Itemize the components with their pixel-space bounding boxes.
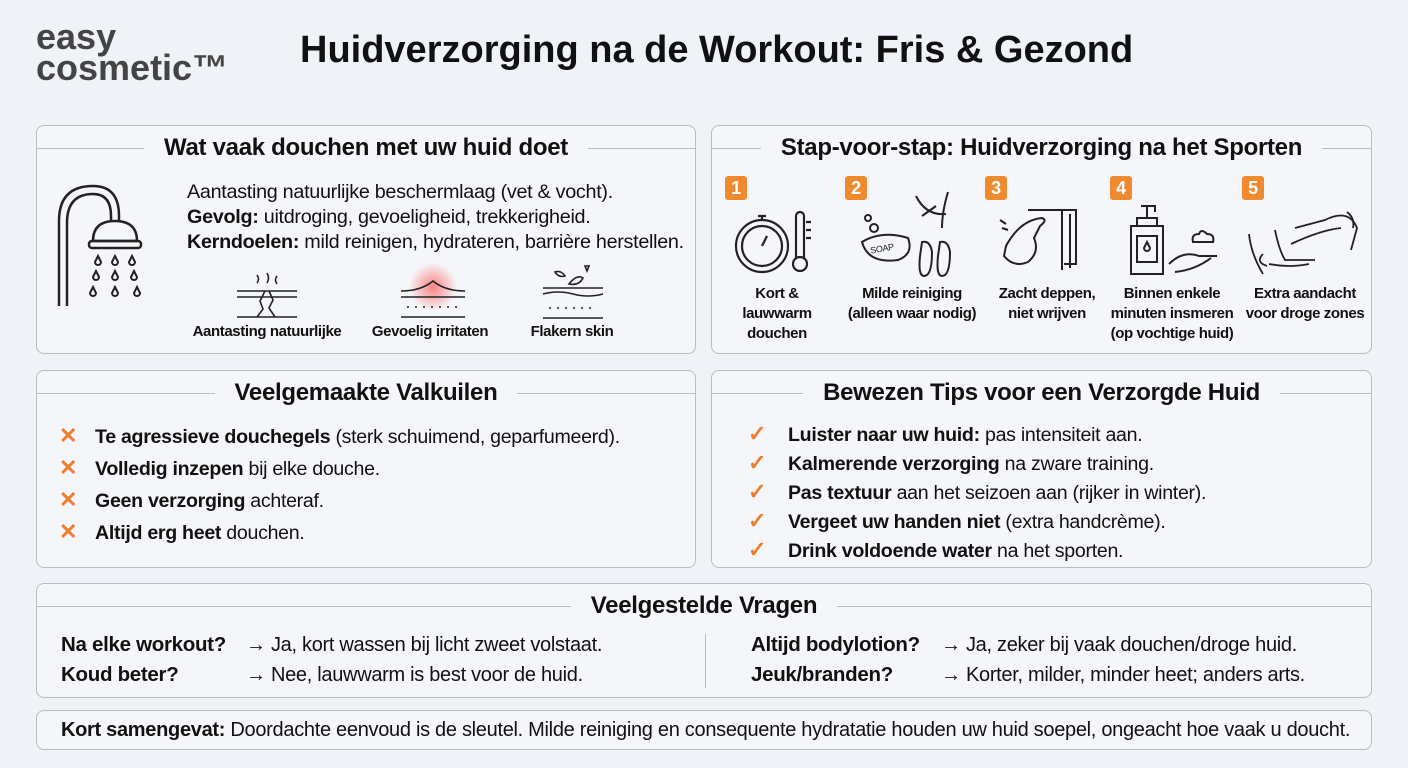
text block: Aantasting natuurlijke beschermlaag (vet & vocht). bbox=[187, 181, 613, 203]
list: Altijd erg heet douchen. bbox=[95, 522, 305, 544]
text block: Gevolg: uitdroging, gevoeligheid, trekkerigheid. bbox=[187, 206, 590, 228]
list: ✕ bbox=[59, 423, 77, 448]
heading: Stap-voor-stap: Huidverzorging na het Sporten bbox=[781, 134, 1302, 161]
list: Pas textuur aan het seizoen aan (rijker in winter). bbox=[788, 482, 1206, 504]
icon: flaky skin bbox=[542, 265, 604, 319]
step 1: 1 bbox=[731, 178, 741, 198]
list: ✕ bbox=[59, 519, 77, 544]
step 2: (alleen waar nodig) bbox=[848, 305, 976, 322]
list: ✓ bbox=[748, 450, 766, 475]
list: ✓ bbox=[748, 537, 766, 562]
step 1: Kort & bbox=[755, 285, 799, 302]
step 4: minuten insmeren bbox=[1111, 305, 1233, 322]
logo: cosmetic™ bbox=[36, 47, 228, 88]
panel: wat vaak douchen: Flakern skin bbox=[531, 323, 613, 340]
icon: cracked skin bbox=[237, 272, 297, 318]
summary: Kort samengevat: Doordachte eenvoud is de sleutel. Milde reiniging en consequente hydratatie houden uw huid soepel, ongeacht hoe vaak u doucht. bbox=[61, 719, 1350, 741]
faq right: Jeuk/branden? bbox=[751, 663, 893, 686]
panel: tips bbox=[711, 370, 1372, 568]
step 4: Binnen enkele bbox=[1124, 285, 1220, 302]
faq left bbox=[61, 633, 602, 686]
list: Kalmerende verzorging na zware training. bbox=[788, 453, 1154, 475]
text block: Kerndoelen: mild reinigen, hydrateren, barrière herstellen. bbox=[187, 231, 684, 253]
step 3: Zacht deppen, bbox=[999, 285, 1095, 302]
step 1: lauwwarm bbox=[742, 305, 812, 322]
step 2 bbox=[845, 176, 976, 322]
faq right: → Korter, milder, minder heet; anders arts. bbox=[941, 664, 1305, 686]
panel: valkuilen bbox=[36, 370, 696, 568]
step 3 bbox=[985, 176, 1095, 322]
panel: FAQ bbox=[36, 583, 1372, 698]
text block bbox=[187, 181, 684, 253]
title: Huidverzorging na de Workout: Fris & Gezond bbox=[300, 29, 1133, 71]
step 2: 2 bbox=[851, 178, 861, 198]
list: Vergeet uw handen niet (extra handcrème). bbox=[788, 511, 1166, 533]
labels: Aantasting natuurlijke bbox=[193, 323, 341, 340]
faq left: Koud beter? bbox=[61, 663, 178, 686]
step 4: (op vochtige huid) bbox=[1111, 325, 1233, 342]
step 5: voor droge zones bbox=[1246, 305, 1364, 322]
step 1: douchen bbox=[747, 325, 807, 342]
step 3: niet wrijven bbox=[1008, 305, 1086, 322]
panel: stap-voor-stap bbox=[711, 125, 1372, 354]
list: Te agressieve douchegels (sterk schuimend, geparfumeerd). bbox=[95, 426, 620, 448]
faq left: Na elke workout? bbox=[61, 633, 226, 656]
list: ✕ bbox=[59, 487, 77, 512]
step 1 bbox=[725, 176, 812, 342]
faq left: → Ja, kort wassen bij licht zweet volstaat. bbox=[246, 634, 602, 656]
heading: Veelgemaakte Valkuilen bbox=[235, 379, 497, 406]
icon: shower bbox=[58, 184, 142, 306]
step 4 bbox=[1110, 176, 1233, 342]
list: ✕ bbox=[59, 455, 77, 480]
list: ✓ bbox=[748, 479, 766, 504]
faq right bbox=[751, 633, 1305, 686]
faq left: → Nee, lauwwarm is best voor de huid. bbox=[246, 664, 583, 686]
summary bbox=[36, 710, 1372, 750]
list: Volledig inzepen bij elke douche. bbox=[95, 458, 380, 480]
faq right: → Ja, zeker bij vaak douchen/droge huid. bbox=[941, 634, 1297, 656]
list: Drink voldoende water na het sporten. bbox=[788, 540, 1123, 562]
step 5 bbox=[1242, 176, 1364, 322]
list bbox=[59, 423, 620, 544]
list: Luister naar uw huid: pas intensiteit aan. bbox=[788, 424, 1142, 446]
panel: wat vaak douchen: Gevoelig irritaten bbox=[372, 323, 488, 340]
step 3: 3 bbox=[991, 178, 1001, 198]
heading: Bewezen Tips voor een Verzorgde Huid bbox=[823, 379, 1260, 406]
step 2: Milde reiniging bbox=[862, 285, 962, 302]
logo: easy bbox=[36, 16, 116, 57]
panel: wat vaak douchen bbox=[36, 125, 696, 354]
step 2: SOAP bbox=[869, 242, 895, 256]
icon: irritated skin bbox=[401, 264, 465, 318]
list: ✓ bbox=[748, 508, 766, 533]
list bbox=[748, 421, 1206, 562]
heading: Veelgestelde Vragen bbox=[591, 592, 817, 619]
step 5: 5 bbox=[1248, 178, 1258, 198]
heading: Wat vaak douchen met uw huid doet bbox=[164, 134, 568, 161]
step 4: 4 bbox=[1116, 178, 1126, 198]
list: Geen verzorging achteraf. bbox=[95, 490, 324, 512]
list: ✓ bbox=[748, 421, 766, 446]
faq right: Altijd bodylotion? bbox=[751, 633, 920, 656]
logo bbox=[36, 16, 228, 88]
step 5: Extra aandacht bbox=[1254, 285, 1356, 302]
